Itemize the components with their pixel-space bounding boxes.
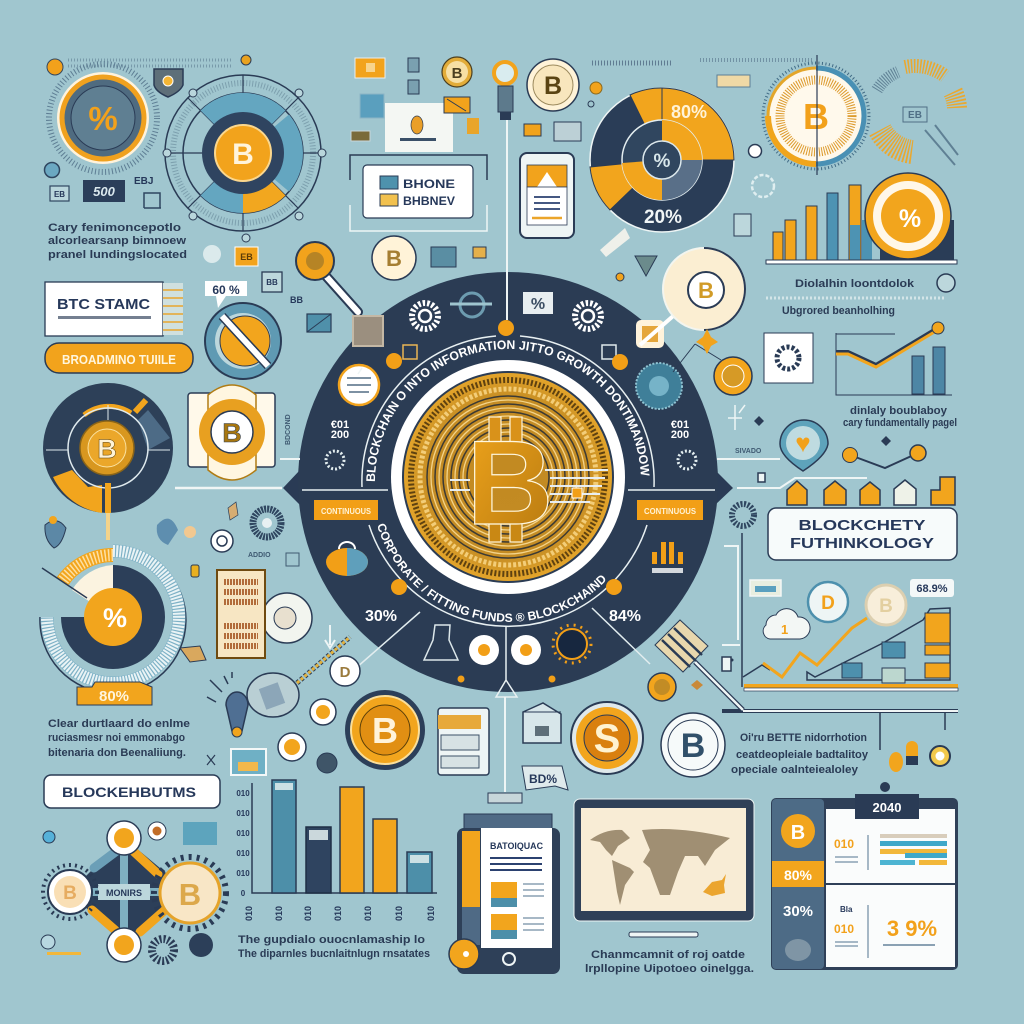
panel: left donut <box>43 378 282 540</box>
sidebar dark stat: 30% <box>783 903 813 920</box>
area chart: right: D <box>821 593 835 614</box>
dashboard: 010 <box>834 922 854 936</box>
text block: monitor caption: Chanmcamnit of roj oatde <box>591 949 745 961</box>
bar chart: bottom left: 010 <box>303 906 313 921</box>
connector: bottom stem <box>488 697 522 803</box>
stat chips: EB <box>54 190 65 199</box>
panel: top-right B coin <box>700 55 869 175</box>
dashboard: 010 <box>834 837 854 851</box>
center hub: 200 <box>331 429 349 441</box>
center hub <box>283 272 733 698</box>
icon: heart pin and nodes: SIVADO <box>735 448 762 455</box>
year tab <box>855 794 919 819</box>
stat chips <box>50 176 161 208</box>
ring icons <box>412 303 438 329</box>
lock icon <box>326 548 368 576</box>
icon: cream B coin: B <box>386 246 402 271</box>
network: coins and gears: B <box>179 877 201 912</box>
button: orange banner <box>45 343 193 373</box>
icon: cream B coin <box>372 236 486 280</box>
icon: heart pin and nodes: ♥ <box>795 428 811 458</box>
monitor: world map <box>574 799 754 937</box>
callout: 60% with crossed coin: 60 % <box>212 283 240 297</box>
pie chart: 80% <box>671 102 707 122</box>
text block: lower right <box>731 732 869 776</box>
world map continents <box>590 830 630 856</box>
bitcoin letter <box>489 417 501 449</box>
bar chart: bottom left: 010 <box>274 906 284 921</box>
icon: B coin white: B <box>681 727 705 765</box>
title card: Blockehbutms <box>44 775 220 808</box>
radial chart: B segments <box>163 55 326 242</box>
title card: BTC STAMC <box>45 282 183 336</box>
text block: top-left description: Cary fenimoncepotlo <box>48 222 181 234</box>
button: orange banner: BROADMINO TUIILE <box>62 352 176 367</box>
bar chart: bottom left: 0 <box>241 889 246 898</box>
icon: magnified coin: B <box>698 278 714 303</box>
axis labels: 010 <box>236 789 250 798</box>
area chart: right <box>722 533 958 750</box>
sidebar coin <box>781 814 815 848</box>
text block: lower left: bitenaria don Beenaliiung. <box>48 747 186 759</box>
dashboard: Bla <box>840 905 853 914</box>
text block: top right: Diolalhin loontdolok <box>795 278 915 290</box>
bar chart: bottom left: 010 <box>363 906 373 921</box>
pie chart: % <box>654 151 671 172</box>
center hub: CONTINUOUS <box>321 507 372 516</box>
lower icons <box>424 625 458 660</box>
card: grid with tool <box>180 570 335 662</box>
ring arcs <box>362 336 654 487</box>
icon: pin and compass: D <box>340 664 351 681</box>
pie chart <box>590 88 734 232</box>
text block: mid right: dinlaly boublaboy <box>850 405 948 417</box>
bar chart: bottom left: 010 <box>244 906 254 921</box>
small icons row <box>203 245 331 332</box>
badge: percent coin: % <box>899 205 921 233</box>
radial hatch chart <box>717 66 958 165</box>
badge: cream flower B: BDCOND <box>285 414 292 445</box>
white ring <box>391 360 625 594</box>
center hub: 200 <box>671 429 689 441</box>
orange ring dots <box>498 320 514 336</box>
curved footer: CORPORATE / FITTING FUNDS ® BLOCKCHAIND <box>378 524 606 622</box>
text block: lower left: ruciasmesr noi emmonabgo <box>48 732 185 744</box>
text block: top-left description <box>48 222 187 261</box>
bar chart: bottom left: 010 <box>394 906 404 921</box>
badge: percent coin <box>865 173 951 259</box>
title card: Blockchety Futhinkology <box>768 508 957 560</box>
text block: lower left: Clear durtlaard do enlme <box>48 718 190 730</box>
coin letter: B <box>232 138 254 171</box>
text block: mid right <box>843 405 957 429</box>
text block: top-left description: pranel lundingslocated <box>48 249 187 261</box>
icon: striped comb <box>648 620 743 710</box>
center hub: CONTINUOUS <box>644 507 697 516</box>
text block: mid right: cary fundamentally pagel <box>843 417 957 429</box>
tablet: document <box>449 814 560 974</box>
icon: envelope and bubble <box>522 703 568 790</box>
network: coins and gears: B <box>63 883 77 904</box>
dashboard: 80% <box>784 867 813 883</box>
small tokens <box>880 741 950 792</box>
note cards: B <box>452 65 463 82</box>
curved heading: BLOCKCHAIN O INTO INFORMATION JITTO GROWTH DONTIMANDOW <box>366 340 650 482</box>
center hub: % <box>531 296 545 313</box>
bar chart: bottom left: 010 <box>236 809 250 818</box>
panel: percent gauge <box>40 547 186 693</box>
icon: dollar coin <box>571 702 643 774</box>
connector: top stem and bulb <box>494 62 516 320</box>
coins row: bottom middle left <box>207 690 425 775</box>
panel: top-left percent badge <box>44 59 232 178</box>
title card: Blockchety Futhinkology: BLOCKCHETY <box>798 517 926 534</box>
title card: Blockchety Futhinkology: FUTHINKOLOGY <box>790 535 934 552</box>
small icons row: EB <box>240 252 253 262</box>
icon: document <box>438 708 489 775</box>
icon: top B coin <box>527 59 673 111</box>
bar chart: bottom left: 010 <box>333 906 343 921</box>
pie chart: 20% <box>644 207 682 228</box>
area chart: right: 68.9% <box>916 583 948 595</box>
icon cluster: left of ring <box>45 502 299 577</box>
icon: envelope and bubble: BD% <box>529 772 557 786</box>
radial hatch chart: EB <box>908 110 922 121</box>
bar chart: bottom left <box>236 780 437 921</box>
icon cluster: left of ring: ADDIO <box>248 552 271 559</box>
icon: small coin with connector <box>673 329 752 395</box>
dashboard: 2040 <box>873 800 901 815</box>
tablet: document: BATOIQUAC <box>490 841 543 852</box>
dashboard <box>771 794 958 970</box>
scattered white sparks <box>358 368 745 662</box>
bar chart: bottom left: 010 <box>426 906 436 921</box>
stat chips: 500 <box>93 184 116 199</box>
text block: top right <box>734 175 955 317</box>
callout: BHONE box: BHBNEV <box>403 194 455 208</box>
panel: percent gauge: % <box>103 603 127 633</box>
center hub: 84% <box>609 608 641 625</box>
percent glyph: % <box>88 100 118 137</box>
small icons row: BB <box>290 295 303 305</box>
dashboard: 3 9% <box>887 916 937 941</box>
text block: monitor caption: lrpllopine Uipotoeo oinelgga. <box>585 963 754 975</box>
text block: lower left <box>48 718 190 759</box>
line chart: gear card <box>764 322 952 395</box>
panel: left donut: B <box>97 434 117 464</box>
bar chart: bottom left: 010 <box>236 829 250 838</box>
text block: bottom chart caption: The gupdialo ouocnlamaship lo <box>238 934 425 946</box>
bars icon <box>652 552 657 564</box>
text block: monitor caption <box>585 949 754 975</box>
coins row: bottom middle left: B <box>372 710 398 751</box>
sidebar orange stat <box>772 861 824 887</box>
icon: magnified coin <box>600 228 745 345</box>
center hub: €01 <box>671 419 689 431</box>
row of house icons <box>717 459 955 526</box>
text block: bottom chart caption <box>238 934 430 960</box>
text block: lower right: ceatdeopleiale badtalitoy <box>736 749 869 761</box>
title card: BTC STAMC: BTC STAMC <box>57 296 150 313</box>
text block: top right: Ubgrored beanholhing <box>782 305 895 317</box>
text block: lower right: Oi'ru BETTE nidorrhotion <box>740 732 867 744</box>
dashboard: B <box>791 822 805 844</box>
icon: top B coin: B <box>544 72 562 100</box>
bar chart: bottom left: 010 <box>236 849 250 858</box>
icon: phone <box>520 153 574 238</box>
text block: bottom chart caption: The diparnles bucnlaitnlugn rnsatates <box>238 948 430 960</box>
badge: cream flower B: B <box>222 418 242 448</box>
bar chart: bottom left: 010 <box>236 869 250 878</box>
icon: pin and compass <box>207 637 360 737</box>
icon: dollar coin: S <box>594 717 620 761</box>
title card: Blockehbutms: BLOCKEHBUTMS <box>62 784 196 800</box>
teal globe <box>636 363 682 409</box>
ring percent labels: 30% <box>365 608 397 625</box>
ring small labels: €01 <box>331 419 349 431</box>
label: 80%: 80% <box>99 688 129 705</box>
panel: top-right B coin: B <box>803 96 829 137</box>
small icons row: BB <box>266 278 278 287</box>
text block: top-left description: alcorlearsanp bimnoew <box>48 235 186 247</box>
network: coins and gears: MONIRS <box>106 888 142 898</box>
callout: BHONE box <box>350 155 487 231</box>
icon: magnifier <box>296 242 358 312</box>
icon: B coin white <box>661 713 725 777</box>
center hub: B <box>467 416 553 550</box>
area chart: right: B <box>879 596 893 617</box>
icon: shield <box>154 69 183 97</box>
label: 80% <box>77 682 152 705</box>
network: coins and gears <box>41 821 226 962</box>
area chart: right: 1 <box>781 622 788 637</box>
bar chart: top right <box>766 185 957 264</box>
callout: BHONE box: BHONE <box>403 177 455 191</box>
callout: 60% with crossed coin <box>205 281 281 379</box>
orange labels <box>314 500 378 520</box>
circuit traces <box>450 470 608 502</box>
dark ring <box>298 272 718 692</box>
text block: lower right: opeciale oalnteiealoley <box>731 764 859 776</box>
gold coin <box>402 371 614 583</box>
icon: heart pin and nodes <box>735 416 926 471</box>
badge: cream flower B <box>188 385 300 480</box>
note cards <box>351 57 581 152</box>
left badge <box>339 365 379 405</box>
stat chips: EBJ <box>134 176 153 187</box>
